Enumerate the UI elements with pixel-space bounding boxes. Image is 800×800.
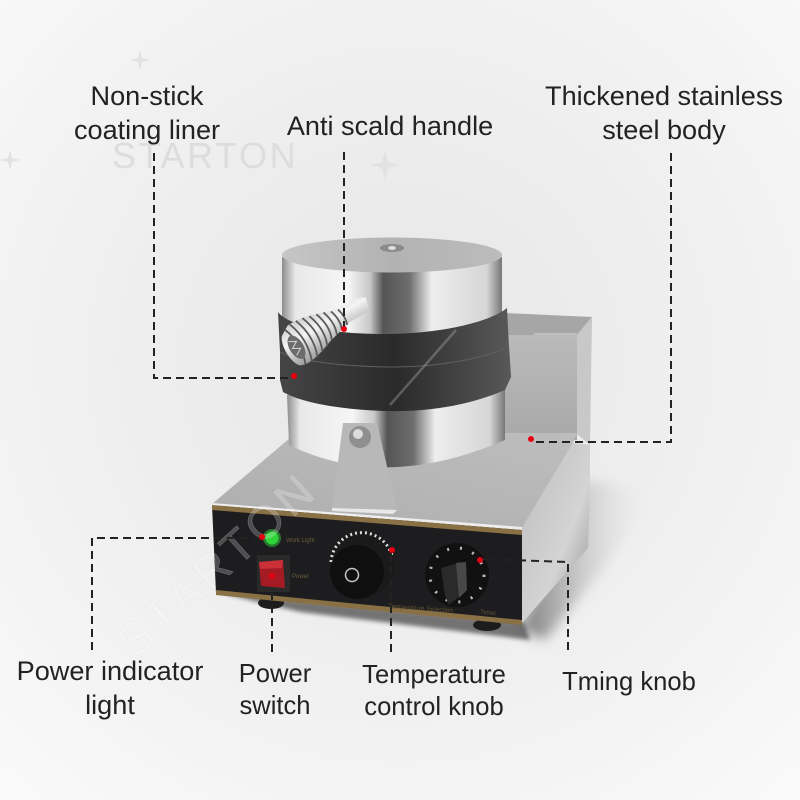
rear housing box	[505, 313, 592, 445]
label: Temperature control knob: Temperature	[362, 661, 506, 689]
leader: switch	[269, 573, 275, 652]
black rings	[278, 308, 511, 411]
leader: handle	[341, 152, 347, 332]
bracket with bolt	[332, 423, 397, 514]
label: Thickened stainless steel body: Thickened stainless	[545, 80, 783, 111]
timer knob	[425, 543, 489, 607]
watermark text	[0, 50, 400, 180]
label: Non-stick coating liner: coating liner	[74, 114, 220, 145]
feet	[258, 597, 501, 631]
diagonal watermark: STARTON	[107, 462, 327, 667]
label: Power switch: Power	[239, 660, 312, 688]
control panel	[212, 503, 522, 625]
power indicator: Work Light	[286, 538, 315, 544]
timer caption: Timer	[480, 609, 498, 617]
label: Power switch: switch	[239, 692, 311, 720]
watermark text: STARTON	[112, 135, 298, 176]
spring handle	[275, 283, 380, 370]
leader: timer	[477, 557, 568, 650]
label: Power indicator light: light	[85, 689, 135, 720]
temperature knob	[329, 532, 395, 599]
power switch: Power	[292, 574, 309, 580]
lid	[282, 238, 502, 272]
leader: steel body	[528, 153, 671, 442]
leader: indicator light	[92, 534, 265, 650]
label: Non-stick coating liner: Non-stick	[91, 80, 204, 111]
base body right side	[522, 443, 590, 623]
label: Timing knob: Tming knob	[562, 668, 696, 696]
label: Thickened stainless steel body: steel body	[602, 114, 726, 145]
floor shadow	[216, 480, 655, 640]
leader: temperature	[389, 547, 395, 652]
label: Anti scald handle: Anti scald handle	[287, 110, 493, 141]
lower cylinder	[287, 385, 505, 467]
label: Power indicator light: Power indicator	[17, 655, 203, 686]
label: Temperature control knob: control knob	[364, 693, 504, 721]
power indicator	[263, 529, 315, 547]
panel captions: Temperature Selection	[388, 603, 454, 615]
product: waffle maker	[212, 238, 655, 640]
power switch	[257, 555, 309, 592]
upper cylinder	[282, 257, 502, 340]
base body top	[212, 433, 577, 528]
leader: non-stick liner	[154, 153, 297, 379]
